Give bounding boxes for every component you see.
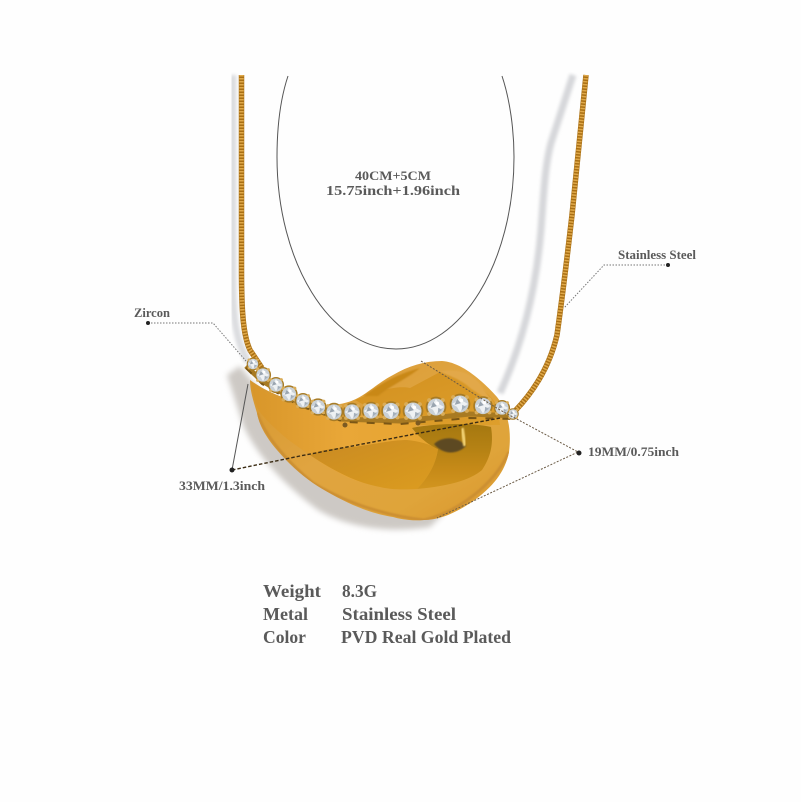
specification list: Metal <box>263 604 308 624</box>
specification list: 8.3G <box>342 581 377 601</box>
callout: zircon <box>134 306 246 361</box>
callout: stainless steel: Stainless Steel <box>618 248 697 262</box>
pendant shadow <box>227 366 445 530</box>
callout: 33MM width <box>179 384 500 493</box>
zircon row <box>246 358 519 428</box>
callout: 19MM depth: 19MM/0.75inch <box>588 444 680 459</box>
outer edge shade <box>257 413 509 520</box>
left inner reflection <box>257 406 430 480</box>
snake chain <box>242 75 586 411</box>
length label: 40CM+5CM <box>355 168 431 183</box>
length label <box>326 168 461 198</box>
teardrop pendant <box>250 361 510 520</box>
specification list: PVD Real Gold Plated <box>341 627 511 647</box>
length label: 15.75inch+1.96inch <box>326 183 461 198</box>
callout: stainless steel <box>564 248 697 308</box>
specification list: Stainless Steel <box>342 604 456 624</box>
upper dome <box>355 372 500 425</box>
callout: 33MM width: 33MM/1.3inch <box>179 478 266 493</box>
lower left reflection <box>310 440 438 489</box>
necklace infographic <box>134 74 696 643</box>
length loop outline <box>277 76 514 349</box>
specification list: Weight <box>263 581 321 601</box>
specification list <box>263 581 511 647</box>
chain shadows <box>233 75 573 393</box>
callout: 19MM depth <box>421 361 680 518</box>
callout: zircon: Zircon <box>134 306 170 320</box>
ball reflection <box>412 424 492 489</box>
specification list: Color <box>263 627 306 647</box>
